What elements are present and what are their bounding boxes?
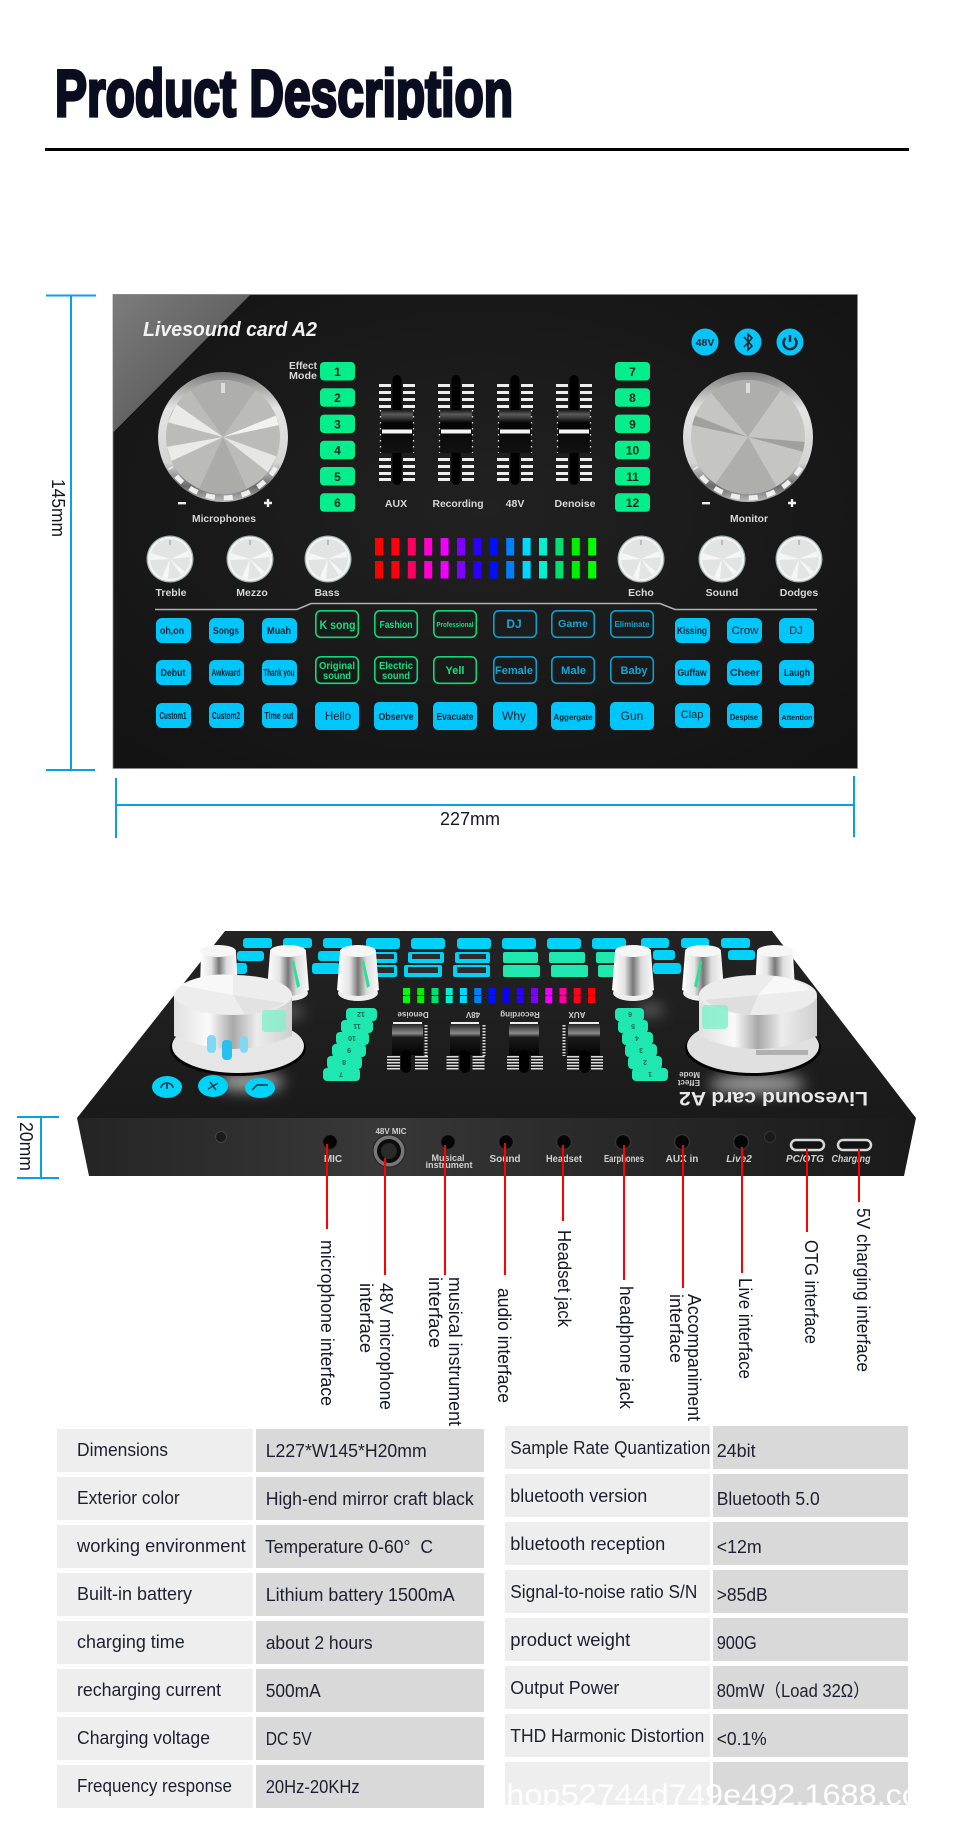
spec table: left: about 2 hours: [266, 1633, 373, 1653]
connector labels: instrument: [426, 1160, 472, 1170]
callout labels: 5V charging interface: [853, 1208, 873, 1372]
green effect strips: 6: [628, 1010, 632, 1017]
small knobs: treble, mezzo, bass, echo, sound, dodges: Mezzo: [236, 587, 268, 599]
callout labels: headphone jack: [616, 1286, 636, 1410]
effect buttons 1 to 6: 1: [334, 365, 341, 379]
connector labels: Sound: [489, 1154, 521, 1165]
spec table: right: [490, 1426, 920, 1812]
effect buttons 1 to 6: 2: [334, 391, 341, 405]
spec table: right: Output Power: [510, 1678, 619, 1698]
middle button group: Game: [558, 619, 588, 630]
small knobs: treble, mezzo, bass, echo, sound, dodges: Dodges: [780, 587, 818, 599]
connector labels: Charging: [832, 1154, 870, 1165]
panel: sound card front view: [77, 931, 916, 1176]
green effect strips: 3: [639, 1046, 643, 1053]
status buttons: 48V, bluetooth, power: [692, 328, 804, 356]
faders with mirrored labels: Recording: [500, 1010, 540, 1019]
right button group: Kissing: [677, 626, 707, 637]
green effect strips: 8: [342, 1058, 346, 1065]
small knobs: treble, mezzo, bass, echo, sound, dodges: [146, 536, 822, 599]
spec table: right: Sample Rate Quantization: [510, 1438, 710, 1458]
middle button group: Eliminate: [614, 620, 650, 629]
panel: sound card top view: [113, 294, 858, 768]
spec table: left: [57, 1429, 484, 1808]
right button group: Cheer: [730, 668, 760, 679]
surface glow: [216, 1004, 805, 1094]
knob: microphones: [158, 372, 288, 502]
spec table: right: Bluetooth 5.0: [717, 1489, 820, 1509]
faders with mirrored labels: AUX: [568, 1010, 585, 1019]
small knobs: treble, mezzo, bass, echo, sound, dodges: Treble: [156, 587, 187, 599]
spec table: left: DC 5V: [266, 1729, 312, 1749]
callout labels: OTG interface: [801, 1240, 821, 1344]
callout labels: musical instrument: [445, 1277, 465, 1426]
connector labels: Headset: [546, 1154, 583, 1165]
label: microphones: [178, 499, 272, 525]
effect buttons 1 to 6: 3: [334, 418, 341, 432]
small knobs, left: [200, 945, 379, 1001]
connector labels: MIC: [324, 1154, 342, 1165]
callout lines: [327, 1143, 859, 1288]
green effect strips: 9: [347, 1046, 351, 1053]
spec table: right: >85dB: [717, 1585, 768, 1605]
spec table: right: <0.1%: [717, 1729, 767, 1749]
spec table: left: Temperature 0-60° C: [265, 1537, 433, 1557]
left button group: Debut: [160, 668, 186, 679]
big knob, right: [685, 975, 821, 1076]
spec table: left: 20Hz-20KHz: [266, 1777, 360, 1797]
green effect strips: 5: [631, 1022, 635, 1029]
left button group: Thank you: [264, 668, 294, 679]
left button group: Custom1: [160, 711, 187, 722]
knob: monitor: [683, 372, 813, 502]
top row buttons: [230, 938, 755, 977]
callout labels: Live interface: [735, 1278, 755, 1379]
label: effect mode: [289, 361, 318, 382]
effect buttons 7 to 12: 11: [626, 470, 639, 484]
status buttons: 48V, bluetooth, power: 48V: [696, 337, 714, 349]
faders: AUX: [385, 498, 407, 510]
spec table: right: 900G: [717, 1633, 757, 1653]
middle button group: K song: [320, 618, 356, 632]
dimension: width 227mm: 227mm: [440, 809, 500, 829]
effect buttons 7 to 12: 12: [626, 496, 639, 510]
faders: Denoise: [554, 498, 596, 510]
dimension: height 20mm: [16, 1117, 59, 1178]
middle button group: Male: [561, 665, 586, 677]
callout labels: interface: [666, 1294, 686, 1363]
dimension: width 227mm: [116, 776, 854, 838]
small knobs: treble, mezzo, bass, echo, sound, dodges: Bass: [314, 587, 340, 599]
spec table: right: bluetooth version: [510, 1486, 647, 1506]
middle button group: Original: [319, 661, 355, 672]
left button group: Muah: [267, 626, 291, 637]
faders with mirrored labels: [392, 1010, 600, 1073]
level meter: [375, 538, 596, 578]
middle button group: sound: [382, 671, 410, 682]
label: effect mode: Mode: [289, 371, 317, 382]
effect buttons 7 to 12: [615, 362, 650, 512]
dimension: height 145mm: [46, 295, 96, 770]
spec table: left: High-end mirror craft black: [266, 1489, 475, 1509]
right button group: Attention: [782, 713, 813, 722]
label: monitor: [702, 499, 796, 525]
spec table: right: Signal-to-noise ratio S/N: [510, 1582, 697, 1602]
spec table: right: 24bit: [717, 1441, 756, 1461]
middle button group: Aggergate: [554, 712, 593, 722]
green effect strips: Effect: [677, 1078, 700, 1087]
middle button group: sound: [323, 671, 351, 682]
spec table: right: THD Harmonic Distortion: [510, 1726, 704, 1746]
right button group: Guffaw: [678, 668, 707, 679]
middle button group: Hello: [325, 709, 351, 723]
green button rows: [503, 952, 624, 977]
middle button group: Gun: [621, 709, 643, 723]
label: monitor: Monitor: [730, 513, 768, 525]
green effect strips: [323, 1008, 700, 1087]
faders: [379, 375, 596, 510]
connector labels: PC/OTG: [786, 1154, 824, 1165]
dark insets of outlined buttons: [376, 954, 486, 973]
spec table: right: bluetooth reception: [510, 1534, 665, 1554]
green effect strips: 7: [339, 1070, 343, 1077]
small knobs: treble, mezzo, bass, echo, sound, dodges: Sound: [706, 587, 738, 599]
callout labels: audio interface: [494, 1288, 514, 1403]
middle button group: Yell: [446, 665, 464, 677]
right button group: DJ: [789, 625, 803, 637]
right button group: Laugh: [784, 668, 810, 679]
faders with mirrored labels: Denoise: [397, 1010, 429, 1019]
effect buttons 7 to 12: 7: [629, 365, 636, 379]
effect buttons 7 to 12: 10: [626, 444, 639, 458]
callout labels: interface: [425, 1277, 445, 1348]
middle button group: Observe: [378, 712, 414, 723]
left button group: oh,on: [160, 626, 184, 637]
connector labels: Earphones: [604, 1154, 644, 1165]
watermark: shop52744d749e492.1688.co: [490, 1779, 920, 1812]
middle button group: Evacuate: [436, 712, 474, 723]
green effect strips: 1: [648, 1070, 652, 1077]
right button group: Clap: [681, 709, 703, 721]
label: microphones: Microphones: [192, 513, 256, 525]
middle button group: Female: [495, 665, 533, 677]
level meter: [403, 988, 595, 1003]
spec table: left: recharging current: [77, 1680, 221, 1700]
callout labels: interface: [356, 1283, 376, 1353]
middle button group: Baby: [621, 665, 648, 677]
small knobs, right: [612, 945, 795, 1001]
label: effect mode: Effect: [289, 361, 318, 372]
green effect strips: 4: [635, 1034, 639, 1041]
spec table: left: Charging voltage: [77, 1728, 210, 1748]
right button group: [675, 618, 814, 728]
dimension: height 20mm: 20mm: [16, 1122, 36, 1171]
left button group: [156, 618, 297, 728]
callout labels: 48V microphone: [376, 1283, 396, 1410]
mirrored brand name: Livesound card A2: [679, 1087, 868, 1108]
faders: 48V: [506, 498, 524, 510]
middle button group: DJ: [506, 617, 522, 631]
middle button group: Professional: [436, 622, 474, 629]
effect buttons 1 to 6: [320, 362, 355, 512]
spec table: left: Frequency response: [77, 1776, 232, 1796]
middle button group: Electric: [379, 661, 413, 672]
spec table: left: 500mA: [266, 1681, 321, 1701]
spec table: right: product weight: [510, 1630, 630, 1650]
spec table: left: L227*W145*H20mm: [266, 1441, 427, 1461]
connector labels: Musical: [431, 1153, 465, 1163]
left button group: Custom2: [212, 711, 240, 722]
dimension: height 145mm: 145mm: [48, 479, 68, 537]
faders with mirrored labels: 48V: [465, 1010, 480, 1019]
green effect strips: 10: [348, 1034, 356, 1041]
callout labels: Accompaniment: [684, 1294, 704, 1421]
spec table: left: Built-in battery: [77, 1584, 192, 1604]
middle button group: Why: [502, 709, 526, 723]
spec table: left: working environment: [76, 1536, 246, 1556]
green effect strips: Mode: [679, 1070, 700, 1079]
callout labels: microphone interface: [317, 1240, 337, 1406]
connector labels: [324, 1127, 870, 1170]
round buttons: [152, 1075, 275, 1098]
effect buttons 7 to 12: 8: [629, 391, 636, 405]
connector labels: AUX in: [666, 1154, 698, 1165]
faders: Recording: [432, 498, 484, 510]
spec table: right: 80mW（Load 32Ω）: [717, 1681, 870, 1701]
spec table: left: Dimensions: [77, 1440, 168, 1460]
effect buttons 1 to 6: 6: [334, 496, 341, 510]
connector labels: 48V MIC: [376, 1127, 407, 1136]
callout labels: Headset jack: [554, 1230, 574, 1328]
callout labels: [317, 1208, 873, 1426]
connectors: [216, 1132, 871, 1167]
effect buttons 1 to 6: 5: [334, 470, 341, 484]
green effect strips: 11: [353, 1022, 361, 1029]
spec table: left: Exterior color: [77, 1488, 180, 1508]
spec table: right: <12m: [717, 1537, 762, 1557]
right button group: Despise: [730, 713, 758, 722]
middle button group: Fashion: [380, 620, 412, 631]
brand name: Livesound card A2: [143, 319, 317, 341]
left button group: Time out: [264, 711, 294, 722]
spec table: left: Lithium battery 1500mA: [266, 1585, 455, 1605]
small knobs: treble, mezzo, bass, echo, sound, dodges: Echo: [628, 587, 654, 599]
effect buttons 1 to 6: 4: [334, 444, 341, 458]
left button group: Awkward: [212, 668, 240, 679]
left button group: Songs: [213, 626, 239, 637]
title: Product Description: [55, 56, 513, 130]
middle button group: [315, 611, 654, 730]
spec table: left: charging time: [77, 1632, 185, 1652]
connector labels: Live2: [726, 1154, 752, 1165]
effect buttons 7 to 12: 9: [629, 418, 636, 432]
green effect strips: 2: [643, 1058, 647, 1065]
green effect strips: 12: [357, 1010, 365, 1017]
big knob, left: [170, 974, 306, 1076]
right button group: Crow: [732, 625, 759, 637]
